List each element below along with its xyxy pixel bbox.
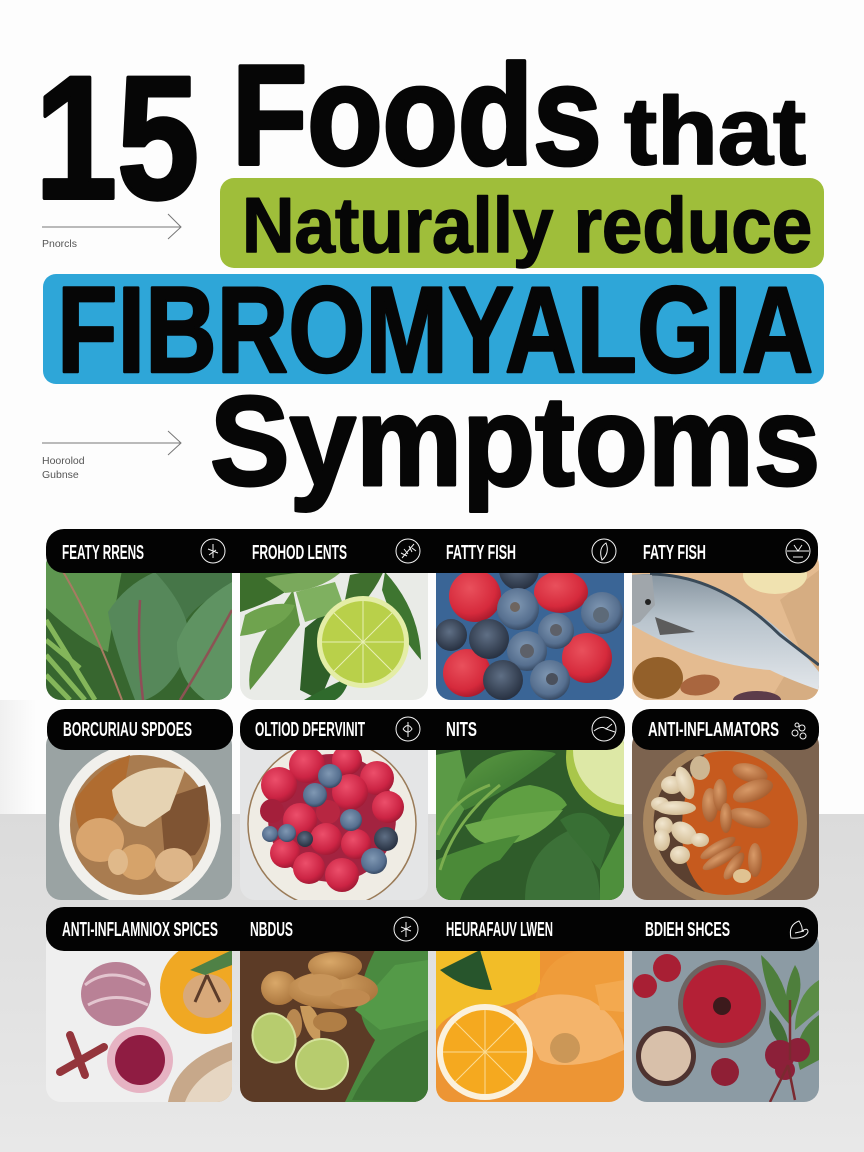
photo: spice bowl: [46, 730, 232, 906]
icon: herb: [201, 539, 225, 563]
icon: fish bones: [786, 539, 810, 563]
label: BDIEH SHCES: BDIEH SHCES: [645, 919, 730, 941]
title: that: that: [624, 78, 806, 185]
label bar: row 2 right: [632, 709, 819, 750]
icon: branch: [592, 717, 616, 741]
label: BORCURIAU SPDOES: BORCURIAU SPDOES: [63, 719, 192, 741]
arrow with note: Pnorcls: [42, 214, 181, 250]
photo: anti-inflammatory spices: [46, 940, 232, 1102]
blue banner: FIBROMYALGIA: FIBROMYALGIA: [57, 261, 813, 398]
photo: citrus and orange slices: [436, 951, 624, 1102]
label bar: row 1: [46, 529, 818, 573]
photo: nuts and spice bowl: [632, 730, 819, 905]
photo: leaves and lime: [240, 573, 428, 700]
label bar: row 2 middle: [240, 709, 625, 750]
photo: fatty fish on board: [632, 558, 819, 700]
arrow with note: Hoorolod Gubnse: Gubnse: [42, 469, 79, 481]
photo: leafy greens: [46, 550, 232, 700]
icon: seed: [592, 539, 616, 563]
photo: berry bowls on grey: [632, 930, 819, 1102]
title: Symptoms: Symptoms: [210, 371, 820, 513]
label: NITS: NITS: [446, 719, 477, 741]
icon: seeds: [394, 917, 418, 941]
label: HEURAFAUV LWEN: HEURAFAUV LWEN: [446, 919, 553, 941]
label: ANTI-INFLAMATORS: ANTI-INFLAMATORS: [648, 719, 779, 741]
photo: mixed berry bowl: [240, 730, 428, 908]
label: FEATY RRENS: FEATY RRENS: [62, 542, 144, 564]
arrow with note: Hoorolod Gubnse: Hoorolod: [42, 455, 85, 467]
label: FATTY FISH: FATTY FISH: [446, 542, 516, 564]
label: FATY FISH: FATY FISH: [643, 542, 706, 564]
title: 15: 15: [35, 40, 199, 236]
label: FROHOD LENTS: FROHOD LENTS: [252, 542, 347, 564]
icon: spice cluster: [792, 723, 806, 739]
label bar: row 3: [46, 907, 818, 951]
arrow with note: Hoorolod Gubnse: [42, 431, 181, 481]
title: Foods: Foods: [232, 37, 602, 195]
photo: berries on denim: [436, 573, 624, 700]
icon: leaf sprig: [396, 717, 420, 741]
arrow with note: Pnorcls: Pnorcls: [42, 238, 77, 250]
label: NBDUS: NBDUS: [250, 919, 293, 941]
icon: sprig: [396, 539, 420, 563]
label: OLTIOD DFERVINIT: OLTIOD DFERVINIT: [255, 719, 365, 741]
photo: nuts, limes, greens on wood: [240, 951, 428, 1102]
icon: leaf heart: [790, 921, 808, 938]
photo: green leaves with lime: [436, 740, 624, 900]
label bar: row 2 left: [47, 709, 233, 750]
green banner: Naturally reduce: Naturally reduce: [242, 182, 812, 269]
label: ANTI-INFLAMNIOX SPICES: ANTI-INFLAMNIOX SPICES: [62, 919, 218, 941]
